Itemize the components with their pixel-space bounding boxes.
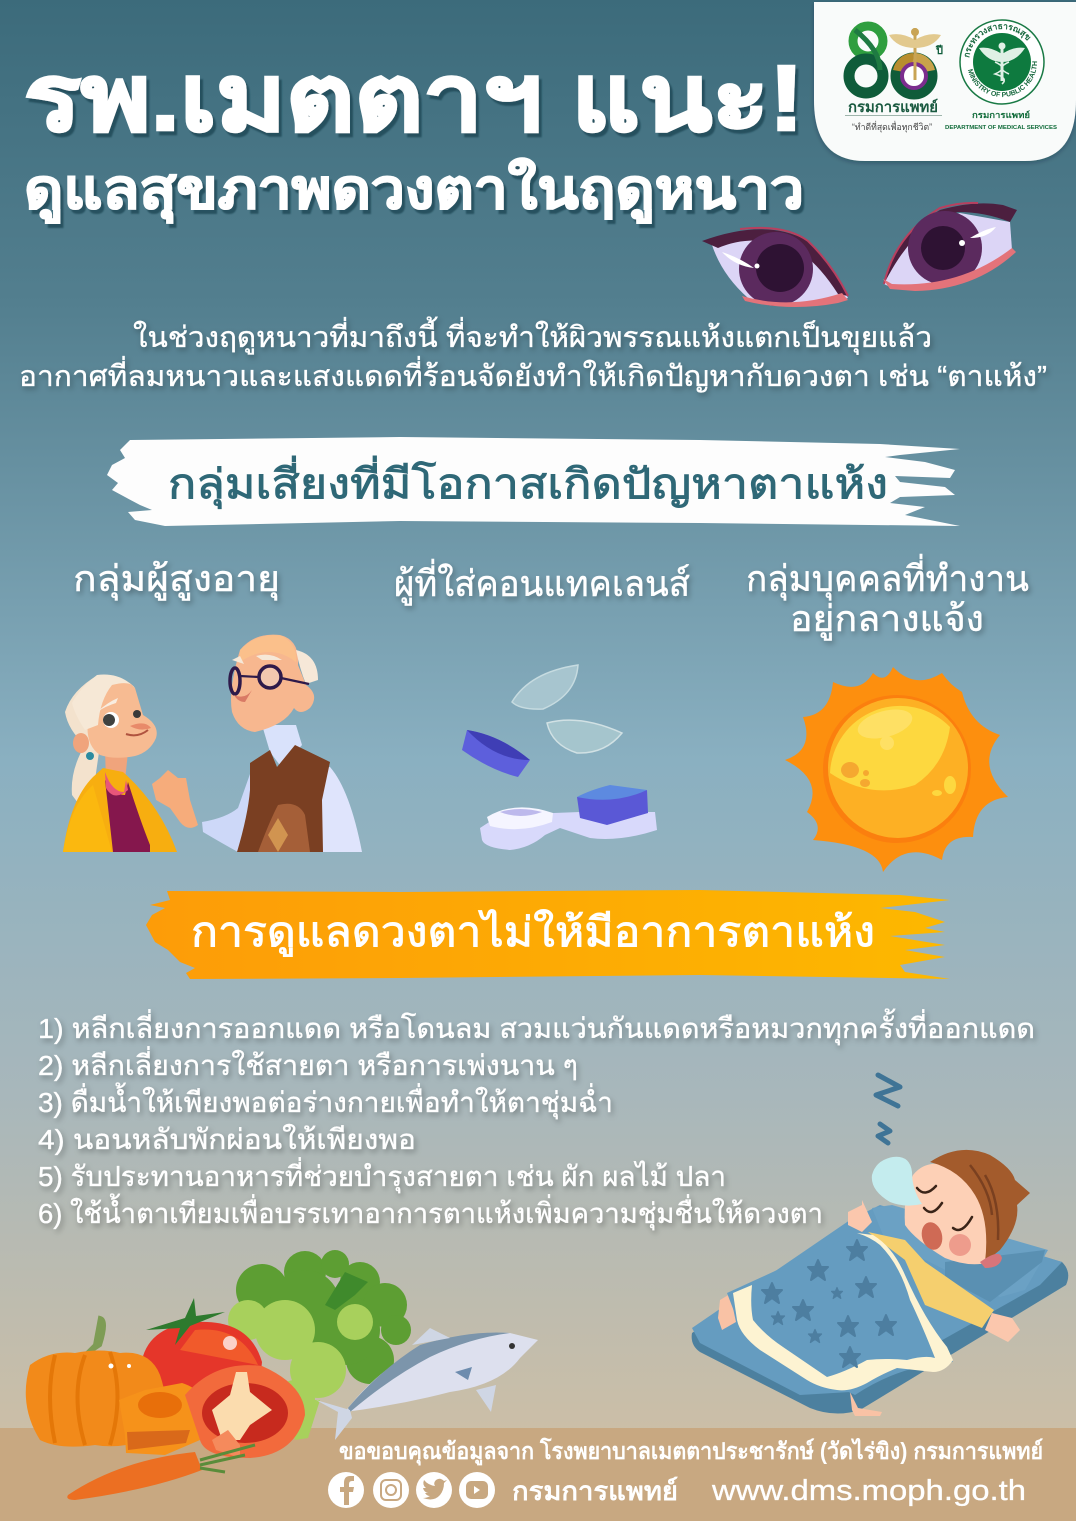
heading: care: การดูแลดวงตาไม่ให้มีอาการตาแห้ง (191, 909, 875, 957)
logo: 80 years: ปี (935, 44, 943, 57)
group labels: กลุ่มบุคคลที่ทำงาน (746, 554, 1029, 601)
lens 2 (547, 720, 622, 753)
tomato half (185, 1365, 305, 1458)
intro text (19, 316, 1047, 393)
logo: Ministry of Public Health seal: กรมการแพทย์ (972, 110, 1030, 120)
logo: Ministry of Public Health seal: DEPARTMENT OF MEDICAL SERVICES (945, 125, 1057, 131)
illustration: vegetables and fish (26, 1250, 538, 1500)
illustration: elderly couple (63, 635, 362, 852)
mattress (692, 1210, 1068, 1414)
icon: left eye (702, 228, 848, 307)
man (152, 635, 362, 852)
woman (63, 675, 177, 852)
care list: 2) หลีกเลี่ยงการใช้สายตา หรือการเพ่งนาน ๆ (38, 1046, 578, 1081)
care list (38, 1008, 1035, 1231)
logo: 80 years: “ทำดีที่สุดเพื่อทุกชีวิต” (852, 120, 932, 133)
social icons (328, 1472, 495, 1508)
logo: 80 years: กรมการแพทย์ (848, 98, 938, 116)
pillow (872, 1205, 1048, 1297)
pumpkin (26, 1318, 210, 1455)
logo: Ministry of Public Health seal: MINISTRY OF PUBLIC HEALTH (968, 61, 1038, 98)
head (905, 1164, 990, 1264)
panel: care banner (146, 890, 950, 979)
footer band (0, 1428, 1076, 1521)
tomato whole (142, 1298, 262, 1430)
care list: 1) หลีกเลี่ยงการออกแดด หรือโดนลม สวมแว่นกันแดดหรือหมวกทุกครั้งที่ออกแดด (38, 1008, 1035, 1046)
illustration: contact lenses (462, 665, 657, 850)
icon: twitter (416, 1472, 452, 1508)
logo: 80 years (845, 26, 943, 133)
illustration: sleeping child (692, 1075, 1068, 1416)
icon: instagram (373, 1472, 409, 1508)
credit line: ขอขอบคุณข้อมูลจาก โรงพยาบาลเมตตาประชารักษ์ (วัดไร่ขิง) กรมการแพทย์ (339, 1437, 1043, 1466)
logo: Ministry of Public Health seal (945, 19, 1057, 131)
group labels (73, 554, 1029, 641)
subtitle: ดูแลสุขภาพดวงตาในฤดูหนาว (24, 157, 804, 224)
blanket stars (762, 1240, 896, 1367)
contact lens case (480, 812, 657, 850)
panel: risk group banner (107, 437, 960, 526)
icon: youtube (459, 1472, 495, 1508)
carrot (67, 1445, 255, 1500)
panel: logo card (812, 2, 1076, 164)
intro text: ในช่วงฤดูหนาวที่มาถึงนี้ ที่จะทำให้ผิวพรรณแห้งแตกเป็นขุยแล้ว (133, 316, 932, 355)
care list: 6) ใช้น้ำตาเทียมเพื่อบรรเทาอาการตาแห้งเพิ่มความชุ่มชื่นให้ดวงตา (38, 1193, 823, 1231)
lens 1 (512, 665, 578, 709)
group labels: ผู้ที่ใส่คอนแทคเลนส์ (394, 559, 690, 606)
snot bubble (872, 1157, 922, 1206)
intro text: อากาศที่ลมหนาวและแสงแดดที่ร้อนจัดยังทำให้เกิดปัญหากับดวงตา เช่น “ตาแห้ง” (19, 356, 1047, 393)
illustration: sun (785, 667, 1008, 872)
blanket (727, 1232, 953, 1395)
zzz (876, 1075, 900, 1143)
pajama (868, 1232, 994, 1328)
care list: 4) นอนหลับพักผ่อนให้เพียงพอ (38, 1123, 416, 1155)
care list: 5) รับประทานอาหารที่ช่วยบำรุงสายตา เช่น ผัก ผลไม้ ปลา (38, 1157, 726, 1194)
footer website: www.dms.moph.go.th (711, 1475, 1026, 1507)
icon: right eye (883, 203, 1017, 291)
logo: Ministry of Public Health seal: กระทรวงสาธารณสุข (964, 24, 1031, 58)
footer department name: กรมการแพทย์ (512, 1476, 678, 1506)
heading: risk groups: กลุ่มเสี่ยงที่มีโอกาสเกิดปัญหาตาแห้ง (168, 456, 888, 509)
hands and feet (848, 1200, 1020, 1342)
case cap (462, 730, 530, 777)
icon: facebook (328, 1472, 364, 1508)
group labels: อยู่กลางแจ้ง (790, 598, 984, 641)
lettuce (228, 1250, 411, 1440)
group labels: กลุ่มผู้สูงอายุ (73, 558, 280, 601)
title: รพ.เมตตาฯ แนะ! (24, 46, 804, 150)
fish (316, 1328, 538, 1440)
care list: 3) ดื่มน้ำให้เพียงพอต่อร่างกายเพื่อทำให้ตาชุ่มฉ่ำ (38, 1082, 613, 1120)
